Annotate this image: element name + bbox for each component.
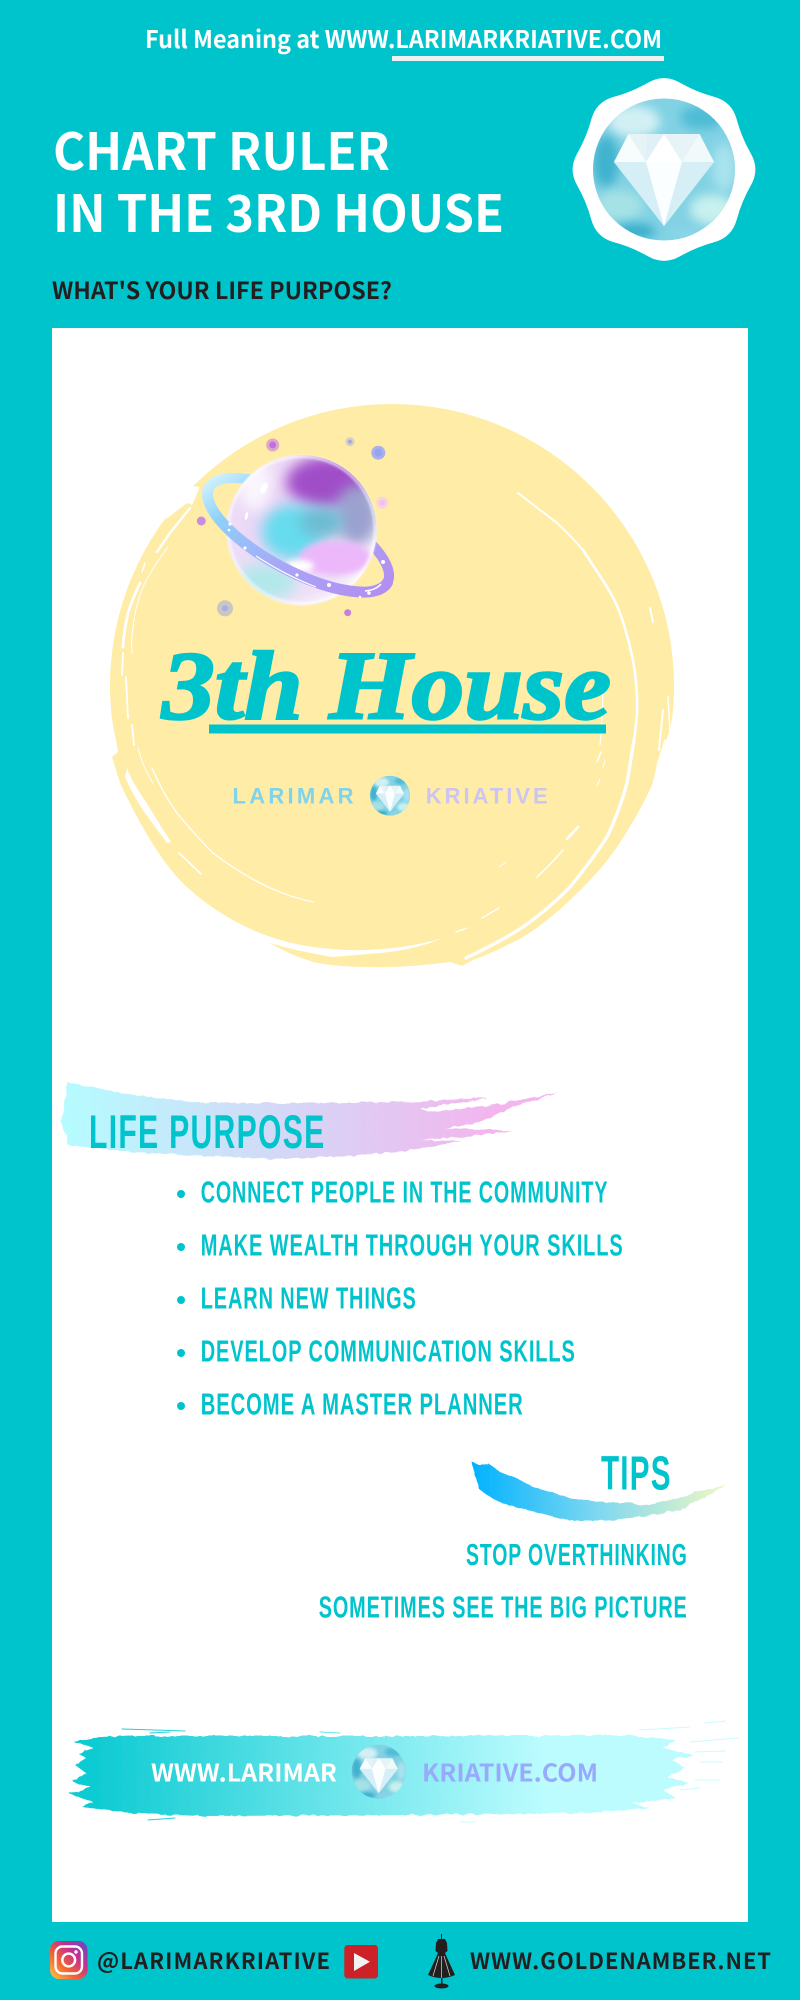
social handle: @LARIMARKRIATIVE	[97, 1944, 330, 1976]
icon: youtube	[344, 1945, 378, 1978]
list: life purpose items	[177, 1175, 624, 1422]
top link line: Full Meaning at WWW.LARIMARKRIATIVE.COM	[145, 21, 662, 56]
list: life purpose items: LEARN NEW THINGS	[201, 1281, 417, 1316]
icon: instagram	[50, 1941, 88, 1979]
title	[53, 111, 504, 247]
title: CHART RULER	[53, 111, 390, 185]
list: life purpose items: BECOME A MASTER PLANNER	[201, 1387, 524, 1422]
section: tips heading with brush: TIPS	[601, 1447, 672, 1500]
banner: website brush	[69, 1721, 738, 1822]
logo: Larimar Kriative: LARIMAR	[232, 783, 354, 808]
heading: 3th House: 3th House	[161, 632, 611, 740]
banner: website brush: WWW.LARIMAR	[151, 1755, 337, 1790]
banner: website brush: KRIATIVE.COM	[422, 1755, 598, 1790]
section: life purpose heading with brush: LIFE PURPOSE	[89, 1105, 326, 1158]
section: life purpose heading with brush	[61, 1082, 559, 1159]
title: IN THE 3RD HOUSE	[53, 173, 504, 247]
text block: tips items	[319, 1537, 688, 1625]
logo: Larimar Kriative	[232, 776, 548, 816]
section: tips heading with brush	[472, 1447, 727, 1521]
subtitle: WHAT'S YOUR LIFE PURPOSE?	[52, 272, 392, 306]
list: life purpose items: DEVELOP COMMUNICATION SKILLS	[201, 1334, 576, 1369]
icon: diamond badge	[573, 78, 755, 261]
icon: dress mannequin	[428, 1934, 455, 1988]
logo: Larimar Kriative: KRIATIVE	[426, 783, 548, 808]
illustration: yellow brush circle	[110, 404, 674, 967]
footer website: WWW.GOLDENAMBER.NET	[470, 1944, 771, 1976]
illustration: planet with ring	[192, 437, 404, 616]
panel: white content	[52, 328, 748, 1922]
